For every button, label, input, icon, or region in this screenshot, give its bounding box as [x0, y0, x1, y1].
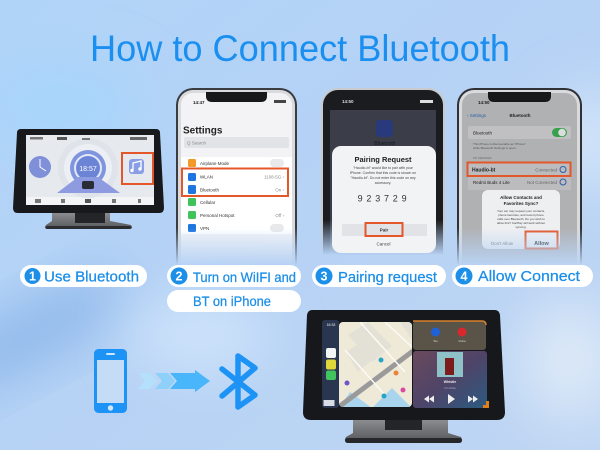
device 2 stand	[345, 420, 462, 443]
CarPlay sidebar	[322, 320, 339, 408]
map	[339, 322, 413, 408]
allow dialog: calls over Bluetooth. Do you wish to	[497, 217, 545, 221]
device 2 bezel	[303, 310, 505, 420]
shortcuts panel: Voice	[458, 339, 466, 343]
phone 4 screen: while Bluetooth Settings is open.	[473, 146, 517, 150]
phone 4 screen: 14:50	[478, 100, 490, 105]
allow dialog: Allow Contacts and	[500, 195, 542, 200]
step 4 label: 4	[461, 270, 468, 284]
step 4 label: Allow Connect	[478, 268, 581, 285]
phone 2 screen: Personal Hotspot	[200, 213, 235, 218]
step 3 label: Pairing request	[338, 270, 437, 286]
step 3 label	[312, 265, 446, 287]
step 3 label: 3	[321, 270, 328, 284]
shortcuts panel: Siu	[433, 339, 438, 343]
phone 4 screen: MY DEVICES	[473, 156, 491, 160]
phone 3: pairing request	[321, 88, 445, 270]
step 1 label	[20, 265, 147, 287]
pairing dialog: iPhone. Confirm that this code is shown on	[350, 171, 416, 175]
allow dialog: Favorites Sync?	[504, 201, 539, 206]
music panel: Whistle	[444, 380, 456, 384]
device 1 screen: 18:57	[79, 166, 97, 173]
step 2 label	[167, 265, 301, 312]
step 1 label: 1	[29, 270, 36, 284]
phone 4 screen: ‹ Settings	[467, 113, 487, 118]
step 2 label: 2	[176, 270, 183, 284]
phone 4 body	[457, 88, 582, 278]
arrow: phone to Bluetooth	[138, 370, 210, 392]
icon: smartphone	[94, 349, 127, 413]
phone 4 screen: Bluetooth	[510, 113, 531, 118]
allow dialog: Allow	[534, 241, 550, 247]
phone 2 screen: Airplane Mode	[200, 161, 230, 166]
step 4 label	[452, 265, 593, 287]
orange highlight	[366, 223, 402, 236]
music tile	[129, 159, 144, 174]
phone 4 screen: Redmi Buds 4 Lite	[473, 180, 510, 185]
phone 2: iPhone settings	[176, 88, 297, 280]
step 1 label: Use Bluetooth	[44, 270, 139, 286]
phone 2 screen: Off ›	[275, 213, 284, 218]
phone 4 screen: Bluetooth	[473, 130, 493, 136]
phone 2 screen: WLAN	[200, 174, 213, 180]
orange highlights	[468, 162, 570, 248]
phone 4 screen: Connected	[535, 168, 557, 172]
phone 2 screen: On ›	[275, 188, 284, 192]
device 1 screen	[26, 135, 154, 205]
pairing dialog	[332, 146, 436, 253]
pairing dialog: accessory.	[375, 181, 391, 185]
allow dialog: allow this? CarPlay will work without	[497, 221, 545, 225]
music panel: Flo Rida	[444, 386, 456, 390]
phone 2 screen: Q Search	[187, 140, 207, 146]
phone 3: pairing request: Bluetooth	[374, 141, 396, 147]
pairing dialog: Pairing Request	[354, 155, 412, 164]
phone 2 screen	[181, 92, 292, 253]
device 1 stand	[45, 213, 132, 229]
pairing dialog: "Haudio-bt". Do not enter this code on any	[350, 176, 416, 180]
pairing dialog: Pair	[380, 228, 388, 232]
pairing dialog: 923729	[358, 194, 410, 204]
allow dialog: phone favorites, and recent phone	[498, 213, 544, 217]
music panel	[413, 351, 489, 408]
phone 3: pairing request: 14:50	[342, 99, 354, 104]
shortcuts panel	[413, 321, 486, 350]
orange highlight	[182, 168, 288, 196]
phone 4 screen: Not Connected	[527, 180, 557, 185]
phone 2 screen: 1108-5G ›	[264, 174, 284, 180]
allow dialog: Your car may request your contacts,	[497, 209, 545, 213]
icon: Bluetooth symbol	[222, 356, 255, 407]
device 1 bezel	[13, 129, 164, 213]
phone 2 screen: Bluetooth	[200, 188, 220, 192]
CarPlay sidebar: 16:33	[327, 323, 335, 327]
phone 2 screen: VPN	[200, 226, 209, 231]
phone 3 body	[321, 88, 445, 248]
phone 2 body	[176, 88, 297, 278]
allow dialog	[482, 190, 560, 249]
step 2 label: BT on iPhone	[193, 293, 271, 309]
step 2 label: Turn on WiIFI and	[193, 269, 296, 285]
allow dialog: syncing.	[515, 225, 527, 229]
pairing dialog: "Haudio-bt" would like to pair with your	[353, 166, 414, 170]
phone 4 screen: Haudio-bt	[472, 168, 496, 174]
device 2: head unit with CarPlay	[303, 310, 505, 443]
phone 4: allow connect	[457, 88, 582, 280]
phone 2 screen: Settings	[183, 126, 223, 136]
phone 4 screen: This iPhone is discoverable as "iPhone"	[473, 142, 526, 146]
title: How to Connect Bluetooth	[90, 28, 510, 69]
orange highlight	[122, 153, 153, 184]
pairing dialog: Cancel	[376, 242, 391, 246]
device 1: head unit with Bluetooth music tile	[13, 129, 164, 229]
allow dialog: Don't Allow	[491, 241, 514, 246]
phone 4 screen	[462, 92, 577, 258]
phone 2 screen: Cellular	[200, 200, 216, 205]
phone 2 screen: 14:47	[193, 100, 205, 105]
